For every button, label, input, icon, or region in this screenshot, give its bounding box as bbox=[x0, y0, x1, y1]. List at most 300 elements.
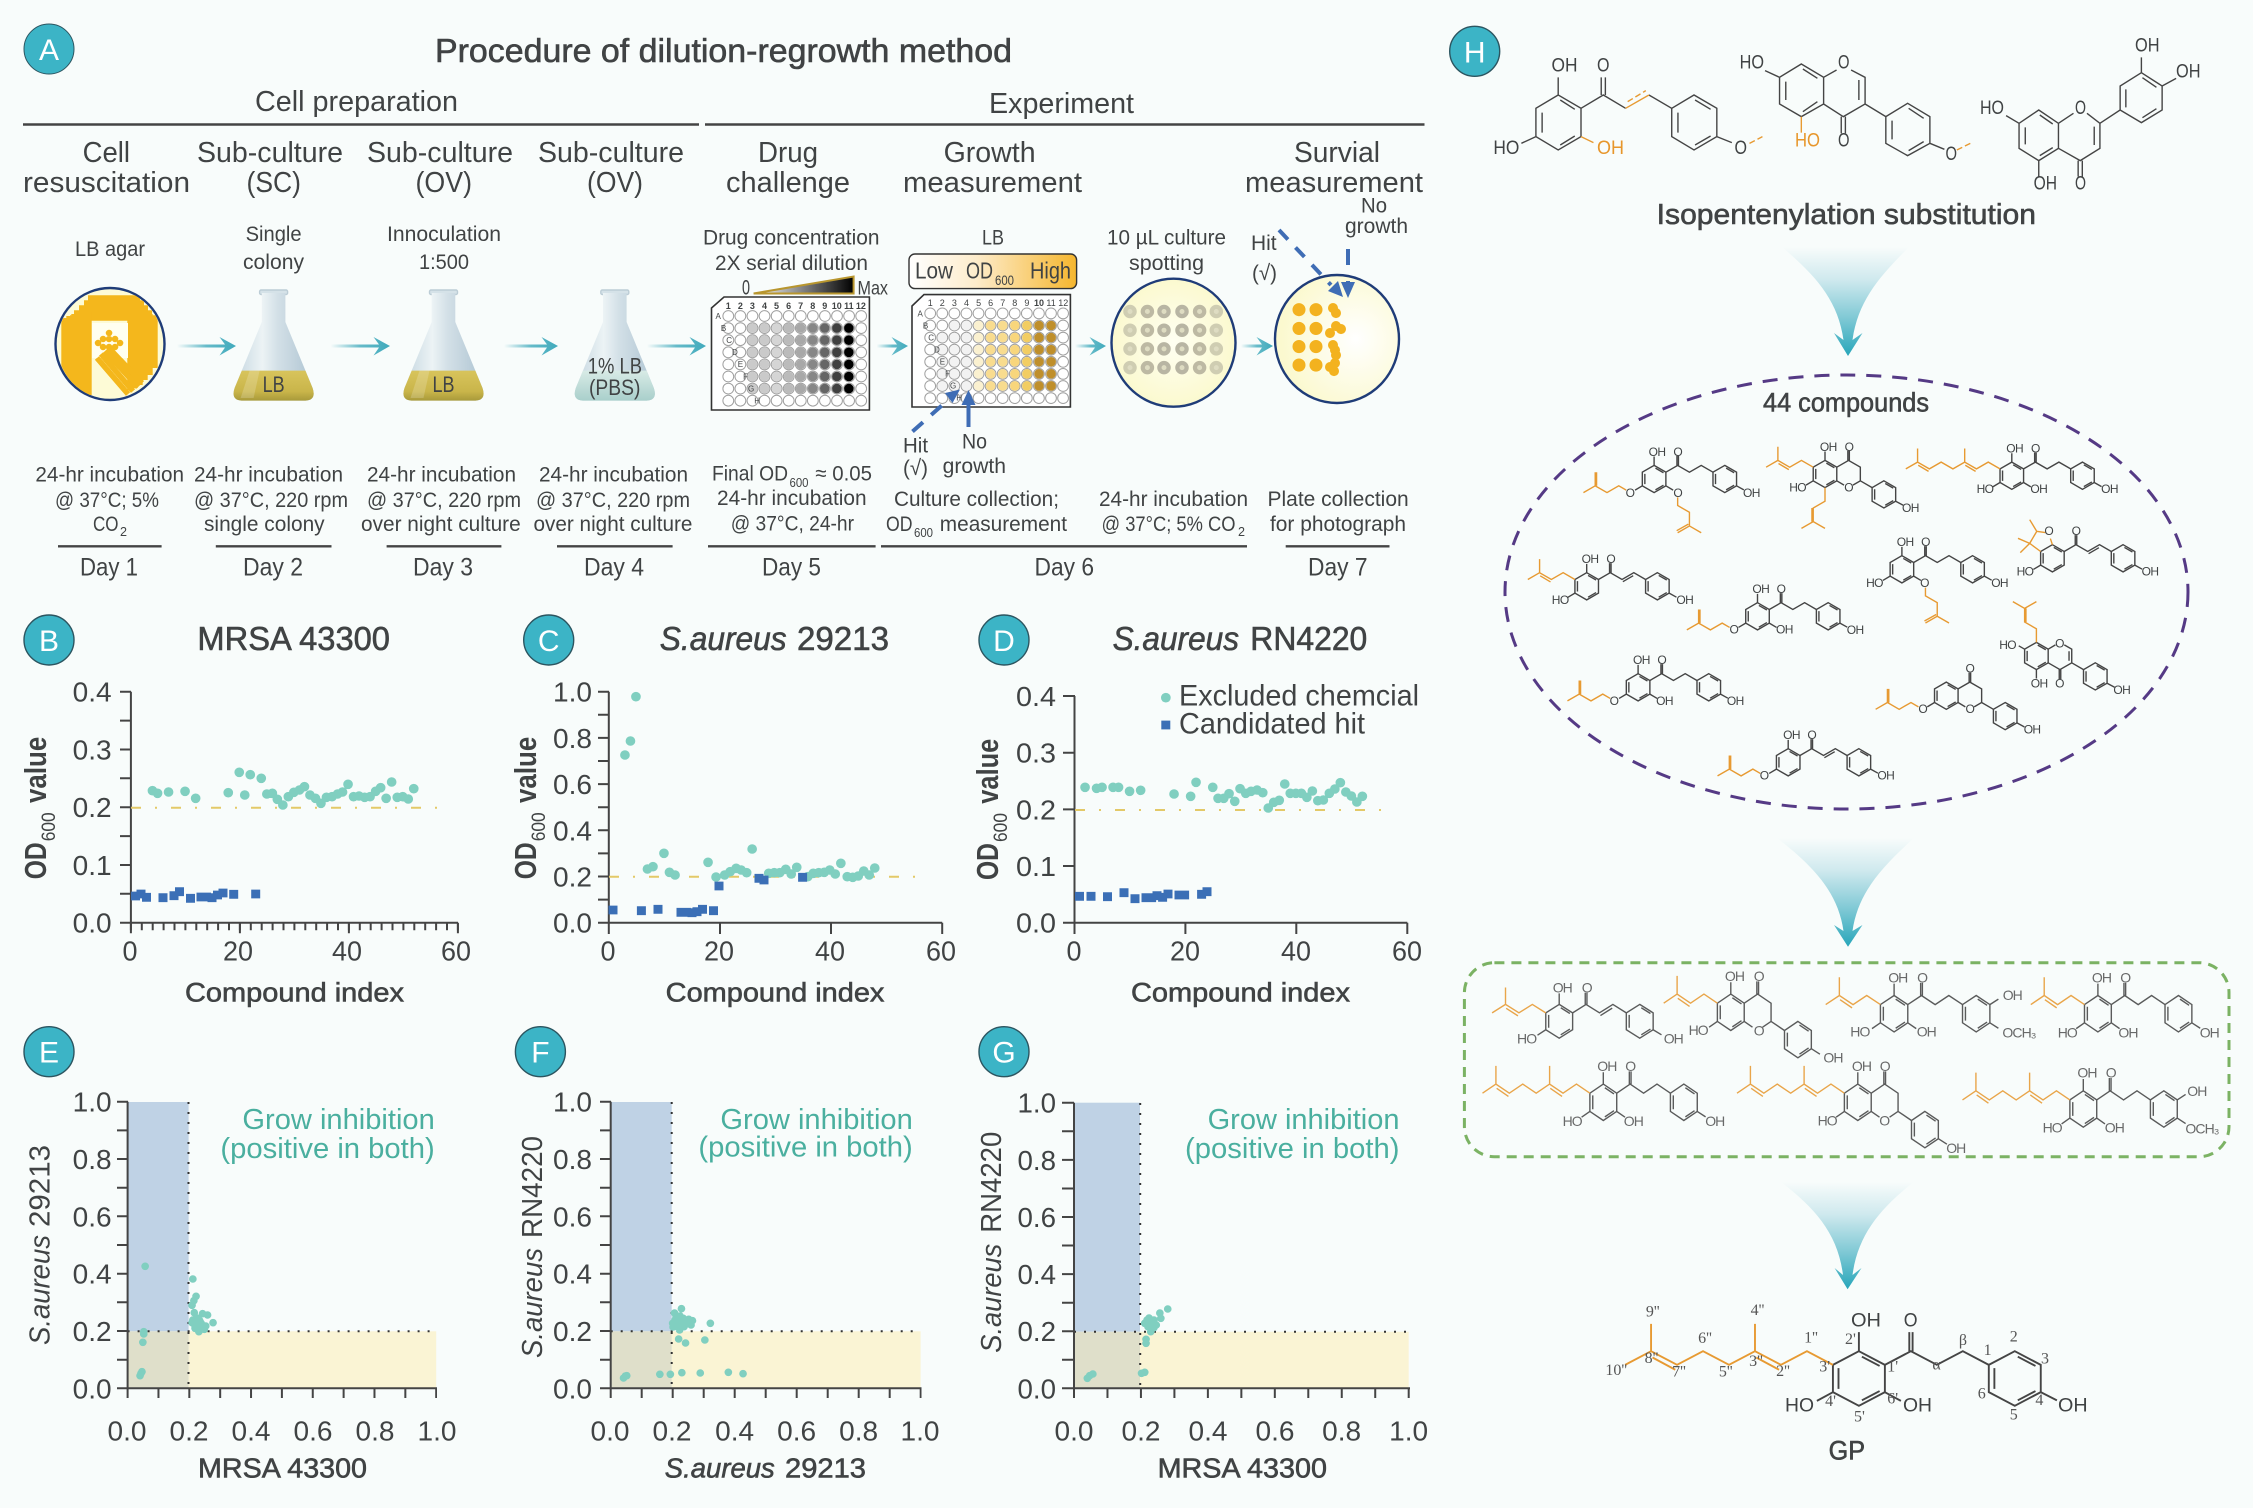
axes F: 0.6 bbox=[553, 1201, 592, 1232]
molecule 6: O bbox=[1777, 582, 1786, 596]
shaded quadrants E bbox=[128, 1102, 436, 1388]
final compound: GP with atom numbering: 5 bbox=[2010, 1406, 2018, 1423]
compound G6: O bbox=[1880, 1058, 1891, 1074]
compound G3: HO bbox=[1850, 1024, 1871, 1040]
96-well growth plate: 11 bbox=[1046, 298, 1056, 308]
molecule 2: HO bbox=[1789, 480, 1806, 494]
axes E bbox=[73, 1087, 457, 1447]
compound G4: OH bbox=[2118, 1024, 2138, 1040]
molecule: isoflavone scaffold: O bbox=[1838, 131, 1850, 152]
molecule 10: OH bbox=[2024, 722, 2041, 736]
points F bbox=[624, 1309, 743, 1378]
molecule: flavone scaffold: OH bbox=[2176, 61, 2200, 82]
axes C: 0.4 bbox=[553, 815, 592, 846]
molecule 2: OH bbox=[1902, 501, 1919, 515]
axes G: 0.6 bbox=[1256, 1416, 1294, 1447]
axes D bbox=[1016, 681, 1422, 967]
compound G3 bbox=[1826, 969, 2036, 1041]
axes C: 0.8 bbox=[553, 723, 592, 754]
step headings: challenge bbox=[726, 167, 850, 199]
final compound: GP with atom numbering: 1 bbox=[1984, 1342, 1992, 1359]
day 6 conditions: @ 37°C; 5% CO bbox=[1102, 512, 1236, 536]
day 4 conditions bbox=[534, 463, 692, 582]
day 6 conditions: Culture collection; bbox=[894, 487, 1059, 511]
axes E: 1.0 bbox=[418, 1416, 456, 1447]
axes F: 0.2 bbox=[553, 1316, 592, 1347]
axes C: 0.0 bbox=[553, 908, 592, 939]
day 5 conditions: Day 5 bbox=[762, 554, 821, 582]
panel C: S. aureus 29213 scatter bbox=[508, 615, 956, 1008]
axes E: 0.6 bbox=[294, 1416, 332, 1447]
candidate hit points B bbox=[131, 892, 260, 898]
day 6 conditions: 2 bbox=[1238, 524, 1245, 539]
axes B: 0.0 bbox=[73, 908, 112, 939]
step headings: Sub-culture bbox=[367, 137, 513, 169]
molecule 3: OH bbox=[2006, 442, 2023, 456]
y-axis title C: value bbox=[508, 737, 543, 803]
final compound: GP with atom numbering: 3' bbox=[1819, 1359, 1830, 1376]
y-axis title E bbox=[25, 1145, 57, 1345]
compound set: seven shortlisted compounds bbox=[1464, 963, 2229, 1157]
day 6 conditions: Day 6 bbox=[1034, 554, 1094, 582]
day 1 conditions: Day 1 bbox=[80, 554, 138, 582]
compound G4: OH bbox=[2200, 1024, 2219, 1040]
axes F: 0.6 bbox=[777, 1416, 816, 1447]
y-axis title D: 600 bbox=[991, 813, 1012, 842]
final compound: GP with atom numbering: 2 bbox=[2010, 1329, 2018, 1346]
axes C bbox=[553, 677, 956, 967]
funnel arrow 2 bbox=[1777, 838, 1914, 947]
step notes above icons bbox=[75, 222, 1226, 275]
annotation G bbox=[1185, 1104, 1400, 1165]
day 2 conditions bbox=[194, 463, 348, 582]
arrows between steps bbox=[177, 337, 1273, 356]
day 6 conditions: 600 bbox=[914, 525, 933, 540]
compound G6: OH bbox=[1946, 1140, 1965, 1156]
molecule: chalcone scaffold bbox=[1493, 56, 1762, 159]
day 7 conditions bbox=[1268, 487, 1409, 582]
compound G5: HO bbox=[1563, 1113, 1583, 1129]
x-axis title B: Compound index bbox=[185, 978, 405, 1008]
day 2 conditions: 24-hr incubation bbox=[194, 463, 343, 487]
molecule: isoflavone scaffold: HO bbox=[1795, 131, 1820, 152]
final compound: GP with atom numbering: 4 bbox=[2035, 1392, 2043, 1409]
axes B: 0.3 bbox=[73, 734, 112, 766]
badge H: H bbox=[1464, 36, 1486, 69]
molecule 9: O bbox=[2055, 636, 2064, 650]
title D: RN4220 bbox=[1250, 620, 1367, 657]
axes B: 20 bbox=[223, 936, 253, 967]
molecule 6: OH bbox=[1776, 622, 1793, 636]
excluded points C bbox=[625, 697, 875, 877]
molecule 9: OH bbox=[2113, 683, 2130, 697]
step notes above icons: 10 µL culture bbox=[1107, 226, 1226, 250]
title: Procedure of dilution-regrowth method bbox=[435, 32, 1012, 69]
compound G3: OH bbox=[1888, 969, 1907, 985]
hit and no growth arrows on plate: growth bbox=[943, 454, 1006, 478]
compound G7: OH bbox=[2187, 1083, 2207, 1099]
axes C: 0 bbox=[600, 936, 616, 967]
96-well drug plate: 12 bbox=[856, 301, 866, 311]
molecule: flavone scaffold: OH bbox=[2135, 36, 2160, 57]
molecule 11 bbox=[1718, 728, 1894, 782]
molecule 10 bbox=[1876, 662, 2041, 736]
compound G7: OH bbox=[2077, 1065, 2097, 1081]
axes G: 0.2 bbox=[1122, 1416, 1160, 1447]
icon: flask with 1% LB in PBS (day 4) bbox=[575, 290, 655, 401]
axes F: 0.8 bbox=[839, 1416, 878, 1447]
axes C: 1.0 bbox=[553, 677, 592, 708]
axes B: 60 bbox=[441, 936, 471, 967]
annotation E bbox=[220, 1104, 435, 1165]
panel F: S. aureus RN4220 vs S. aureus 29213 bbox=[515, 1027, 940, 1483]
final compound: GP with atom numbering: 4' bbox=[1825, 1393, 1836, 1410]
day 3 conditions bbox=[361, 463, 521, 582]
day 3 conditions: 24-hr incubation bbox=[367, 463, 516, 487]
compound G1: HO bbox=[1517, 1030, 1537, 1046]
molecule: chalcone scaffold: O bbox=[1597, 56, 1610, 77]
badge G bbox=[979, 1027, 1029, 1077]
molecule 7: OH bbox=[1897, 535, 1914, 549]
compound G7: O bbox=[2106, 1065, 2117, 1081]
axes F bbox=[553, 1087, 940, 1447]
compound G2: O bbox=[1754, 1023, 1765, 1039]
funnel arrow 1 bbox=[1782, 247, 1909, 356]
y-axis title D: value bbox=[970, 739, 1005, 804]
axes G: 0.8 bbox=[1322, 1416, 1361, 1447]
drug gradient wedge bbox=[742, 276, 888, 300]
step headings: (OV) bbox=[587, 167, 643, 199]
step notes above icons: 1:500 bbox=[419, 250, 469, 274]
panel B: MRSA 43300 scatter bbox=[18, 615, 471, 1008]
badge A bbox=[24, 24, 74, 74]
day 1 conditions: @ 37°C; 5% bbox=[55, 488, 159, 512]
axes B bbox=[73, 677, 471, 967]
day 1 conditions: 24-hr incubation bbox=[35, 463, 184, 487]
step headings: resuscitation bbox=[23, 167, 190, 199]
OD600 legend box bbox=[909, 254, 1077, 289]
molecule 1: O bbox=[1626, 486, 1635, 500]
step headings: (OV) bbox=[416, 167, 472, 199]
molecule 1: O bbox=[1673, 486, 1682, 500]
axes G: 0.6 bbox=[1018, 1202, 1056, 1233]
day 2 conditions: Day 2 bbox=[243, 554, 303, 582]
axes C: 0.2 bbox=[553, 862, 592, 892]
axes G: 0.4 bbox=[1018, 1259, 1056, 1290]
96-well drug plate bbox=[712, 297, 869, 410]
molecule 5: OH bbox=[1582, 552, 1598, 566]
panel D: S. aureus RN4220 scatter bbox=[970, 615, 1422, 1008]
compound G2: HO bbox=[1689, 1022, 1709, 1038]
axes B: 40 bbox=[332, 936, 362, 967]
96-well drug plate: 11 bbox=[844, 301, 854, 311]
day 4 conditions: @ 37°C, 220 rpm bbox=[536, 488, 690, 512]
step headings: Growth bbox=[944, 137, 1036, 169]
molecule 5: OH bbox=[1676, 593, 1693, 607]
day 6 conditions: 24-hr incubation bbox=[1099, 487, 1248, 511]
threshold line C bbox=[609, 876, 921, 878]
day 6 conditions: measurement bbox=[940, 512, 1067, 536]
molecule 7: OH bbox=[1991, 576, 2008, 590]
axes E: 0.8 bbox=[73, 1144, 112, 1175]
compound G2: OH bbox=[1725, 968, 1744, 984]
title B: MRSA 43300 bbox=[197, 620, 390, 657]
y-axis title G bbox=[976, 1132, 1008, 1353]
shaded quadrants G bbox=[1074, 1103, 1409, 1388]
molecule 7: O bbox=[1920, 576, 1929, 590]
molecule 6: O bbox=[1730, 622, 1739, 636]
x-axis title F bbox=[665, 1452, 866, 1483]
candidate hit points C bbox=[608, 877, 807, 913]
molecule 2 bbox=[1766, 440, 1919, 528]
compound G3: OH bbox=[1917, 1024, 1936, 1040]
final compound: GP with atom numbering: 8'' bbox=[1645, 1350, 1658, 1367]
step headings: measurement bbox=[1245, 167, 1423, 199]
axes C: 20 bbox=[704, 936, 734, 967]
96-well drug plate: 10 bbox=[832, 301, 842, 311]
axes B: 0.4 bbox=[73, 677, 112, 708]
day 1 conditions: CO bbox=[93, 512, 118, 536]
axes G: 0.0 bbox=[1018, 1373, 1056, 1404]
96-well growth plate bbox=[912, 295, 1070, 407]
section header: cell preparation: Cell preparation bbox=[255, 86, 458, 118]
hit and no growth arrows on dish: (√) bbox=[1252, 261, 1277, 285]
molecule 10: O bbox=[1966, 662, 1975, 676]
step notes above icons: LB bbox=[982, 226, 1004, 250]
y-axis title F: RN4220 bbox=[517, 1136, 549, 1238]
y-axis title G: RN4220 bbox=[976, 1132, 1008, 1233]
final compound: GP with atom numbering: OH bbox=[1851, 1311, 1881, 1332]
axes D: 60 bbox=[1392, 936, 1422, 967]
badge G: G bbox=[992, 1037, 1016, 1070]
axes F: 1.0 bbox=[900, 1416, 940, 1447]
axes G: 1.0 bbox=[1389, 1416, 1428, 1447]
molecule 8: OH bbox=[1656, 694, 1673, 708]
96-well growth plate: 123456789 bbox=[928, 298, 1029, 308]
compound G3: OH bbox=[2003, 987, 2022, 1003]
panel E: S. aureus 29213 vs MRSA 43300 bbox=[24, 1027, 456, 1483]
y-axis title D bbox=[970, 739, 1012, 880]
title C bbox=[660, 620, 889, 657]
96-well growth plate: 12 bbox=[1058, 298, 1068, 308]
legend D: Candidated hit bbox=[1179, 707, 1366, 740]
step headings: Sub-culture bbox=[197, 137, 343, 169]
day 7 conditions: Day 7 bbox=[1308, 554, 1368, 582]
compound G2 bbox=[1664, 968, 1843, 1065]
molecule: chalcone scaffold: O bbox=[1734, 138, 1747, 159]
badge D: D bbox=[993, 625, 1015, 658]
day 3 conditions: over night culture bbox=[361, 512, 521, 536]
badge E bbox=[24, 1027, 74, 1077]
compound G4: O bbox=[2120, 969, 2131, 985]
y-axis title C bbox=[508, 737, 550, 879]
y-axis title C: OD bbox=[508, 842, 543, 879]
molecule 7 bbox=[1866, 535, 2008, 623]
title C: S.aureus bbox=[660, 620, 787, 657]
badge C: C bbox=[538, 625, 560, 658]
x-axis title F: S.aureus bbox=[665, 1452, 775, 1483]
molecule: isoflavone scaffold: HO bbox=[1740, 52, 1764, 73]
final compound: GP with atom numbering: 7'' bbox=[1672, 1364, 1686, 1381]
axes G: 0.8 bbox=[1018, 1145, 1056, 1176]
legend D bbox=[1161, 680, 1419, 740]
final compound: GP with atom numbering: 6 bbox=[1978, 1385, 1986, 1402]
molecule 1 bbox=[1583, 445, 1760, 533]
molecule: isoflavone scaffold: O bbox=[1946, 144, 1957, 165]
title D bbox=[1113, 620, 1367, 657]
final compound: GP with atom numbering: OH bbox=[1903, 1396, 1932, 1417]
icon: flask with LB (day 3) bbox=[403, 290, 484, 401]
molecule: flavone scaffold: OH bbox=[2034, 173, 2057, 194]
final compound: GP with atom numbering: α bbox=[1932, 1356, 1941, 1373]
axes E: 0.2 bbox=[170, 1416, 208, 1447]
day 5 conditions: Final OD bbox=[712, 461, 788, 485]
molecule 2: O bbox=[1844, 480, 1853, 494]
compound G6: HO bbox=[1818, 1113, 1838, 1129]
axes F: 0.0 bbox=[590, 1416, 630, 1447]
molecule 5: O bbox=[1606, 552, 1615, 566]
section header: experiment: Experiment bbox=[989, 88, 1134, 120]
axes F: 0.8 bbox=[553, 1144, 592, 1175]
molecule 4: HO bbox=[2017, 564, 2034, 578]
compound G7: OH bbox=[2105, 1119, 2124, 1135]
compound G3: OCH₃ bbox=[2002, 1025, 2036, 1041]
compound G2: OH bbox=[1823, 1049, 1843, 1065]
axes E: 0.6 bbox=[73, 1201, 112, 1232]
badge B: B bbox=[39, 625, 59, 658]
y-axis title F: S.aureus bbox=[517, 1248, 549, 1358]
axes E: 0.4 bbox=[232, 1416, 270, 1447]
molecule 6: OH bbox=[1752, 582, 1769, 596]
day 6 conditions bbox=[881, 487, 1248, 582]
final compound: GP with atom numbering: HO bbox=[1785, 1396, 1814, 1417]
molecule 4 bbox=[2017, 520, 2158, 578]
molecule 9: O bbox=[2055, 676, 2064, 690]
step headings: Survial bbox=[1294, 137, 1380, 169]
molecule 2: OH bbox=[1820, 440, 1837, 454]
step headings: Cell bbox=[83, 137, 130, 169]
compound G1: O bbox=[1582, 980, 1593, 996]
y-axis title B: 600 bbox=[39, 812, 60, 841]
final compound: GP with atom numbering: 3'' bbox=[1749, 1353, 1763, 1370]
axes D: 20 bbox=[1170, 936, 1200, 967]
annotation G: Grow inhibition bbox=[1208, 1104, 1400, 1136]
axes D: 40 bbox=[1281, 936, 1311, 967]
molecule 10: O bbox=[1918, 702, 1927, 716]
panel G: S. aureus RN4220 vs MRSA 43300 bbox=[976, 1027, 1428, 1483]
molecule 10: O bbox=[1966, 702, 1975, 716]
step headings bbox=[23, 137, 1423, 199]
annotation F bbox=[698, 1104, 913, 1164]
molecule 4: OH bbox=[2142, 564, 2158, 578]
molecule 8 bbox=[1567, 653, 1744, 708]
day 2 conditions: @ 37°C, 220 rpm bbox=[194, 488, 348, 512]
step notes above icons: Single bbox=[246, 222, 302, 246]
legend D: Excluded chemcial bbox=[1179, 680, 1419, 713]
molecule 1: OH bbox=[1743, 486, 1760, 500]
icon: petri dish with survival colonies bbox=[1275, 275, 1399, 403]
axes E: 0.4 bbox=[73, 1259, 112, 1290]
axes E: 0.2 bbox=[73, 1316, 112, 1347]
final compound: GP with atom numbering: 10'' bbox=[1605, 1362, 1627, 1379]
axes D: 0.1 bbox=[1016, 851, 1056, 882]
final compound: GP with atom numbering: O bbox=[1904, 1311, 1918, 1332]
axes D: 0 bbox=[1066, 936, 1082, 967]
annotation G: (positive in both) bbox=[1185, 1133, 1400, 1165]
axes G bbox=[1018, 1088, 1428, 1447]
badge F bbox=[515, 1027, 565, 1077]
axes B: 0 bbox=[122, 936, 138, 967]
molecule 5 bbox=[1528, 552, 1693, 607]
step notes above icons: spotting bbox=[1129, 251, 1204, 275]
final compound: GP with atom numbering: 4'' bbox=[1751, 1302, 1764, 1319]
molecule 6 bbox=[1687, 582, 1864, 637]
final compound: GP with atom numbering bbox=[1605, 1302, 2088, 1426]
y-axis title C: 600 bbox=[529, 812, 550, 841]
candidate hit points D bbox=[1075, 892, 1212, 899]
icon: flask with LB (day 2): LB bbox=[263, 372, 285, 397]
axes C: 60 bbox=[926, 936, 956, 967]
final compound: GP with atom numbering: 1' bbox=[1887, 1359, 1898, 1376]
step notes above icons: Drug concentration bbox=[703, 226, 880, 250]
drug gradient wedge: Max bbox=[858, 279, 888, 300]
molecule 11: OH bbox=[1877, 768, 1894, 782]
axes D: 0.0 bbox=[1016, 908, 1056, 939]
y-axis title E: 29213 bbox=[25, 1145, 57, 1227]
compound G6: OH bbox=[1852, 1058, 1871, 1074]
96-well drug plate: 123456789 bbox=[726, 301, 827, 311]
molecule 1: O bbox=[1673, 445, 1682, 459]
day 7 conditions: Plate collection bbox=[1268, 487, 1409, 511]
badge H bbox=[1450, 26, 1500, 76]
title D: S.aureus bbox=[1113, 620, 1239, 657]
molecule 8: OH bbox=[1727, 694, 1744, 708]
final compound: GP with atom numbering: OH bbox=[2058, 1396, 2088, 1417]
molecule 3: OH bbox=[2030, 482, 2047, 496]
compound G4: OH bbox=[2092, 969, 2111, 985]
drug gradient wedge: 0 bbox=[742, 276, 750, 300]
molecule 4: O bbox=[2072, 524, 2081, 538]
y-axis title B: OD bbox=[18, 842, 53, 879]
day 7 conditions: for photograph bbox=[1270, 512, 1406, 536]
axes B: 0.1 bbox=[73, 850, 112, 881]
compound G4 bbox=[2031, 969, 2219, 1040]
compound G4: HO bbox=[2058, 1024, 2078, 1040]
excluded points B bbox=[152, 772, 414, 805]
day 4 conditions: Day 4 bbox=[584, 554, 644, 582]
molecule 11: O bbox=[1760, 768, 1769, 782]
points G bbox=[1087, 1309, 1168, 1378]
molecule 7: HO bbox=[1866, 576, 1883, 590]
y-axis title D: OD bbox=[970, 843, 1005, 880]
molecule: isoflavone scaffold bbox=[1740, 52, 1972, 165]
molecule 9: OH bbox=[2031, 676, 2048, 690]
molecule 8: O bbox=[1610, 694, 1619, 708]
final compound: GP with atom numbering: 5' bbox=[1854, 1409, 1865, 1426]
icon: flask with LB (day 3): LB bbox=[432, 372, 454, 397]
panel A: procedure of dilution-regrowth method bbox=[23, 24, 1424, 582]
axes C: 0.6 bbox=[553, 769, 592, 800]
step notes above icons: colony bbox=[243, 250, 304, 274]
96-well growth plate: 10 bbox=[1034, 298, 1044, 308]
icon: petri dish with culture spots bbox=[1112, 279, 1236, 407]
compound set: 44 compounds: 44 compounds bbox=[1763, 388, 1929, 418]
icon: LB agar plate with streaks bbox=[56, 288, 164, 400]
hit and no growth arrows on plate: Hit bbox=[903, 434, 928, 458]
OD600 legend box: Low bbox=[915, 257, 953, 283]
day 1 conditions bbox=[35, 463, 184, 582]
final compound: GP with atom numbering: 2' bbox=[1845, 1331, 1856, 1348]
